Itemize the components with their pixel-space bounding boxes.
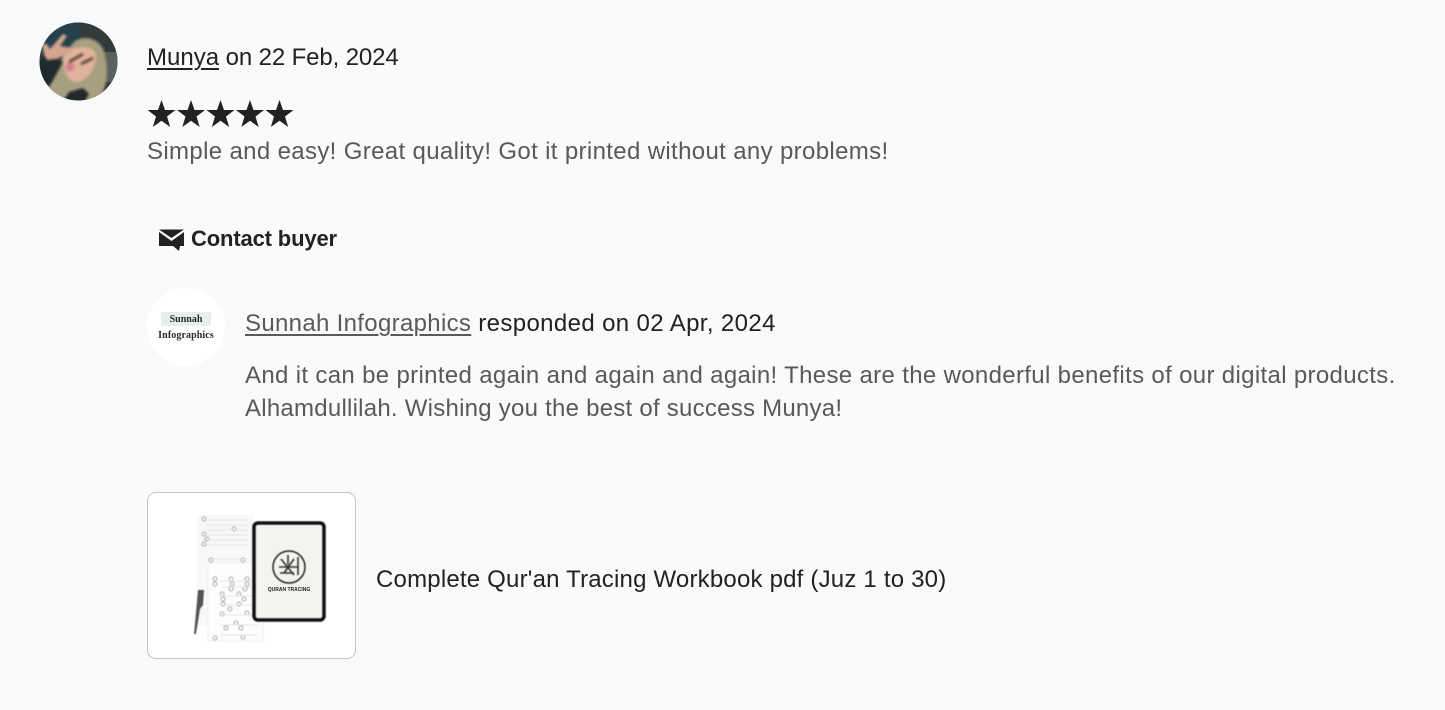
product card xyxy=(147,492,356,659)
icon: envelope xyxy=(159,230,184,251)
logo highlight xyxy=(161,312,211,326)
contact buyer link: Contact buyer xyxy=(191,226,337,251)
review text: Simple and easy! Great quality! Got it printed without any problems! xyxy=(147,138,888,165)
star rating xyxy=(148,100,294,127)
seller logo xyxy=(147,288,225,366)
product title: Complete Qur'an Tracing Workbook pdf (Juz 1 to 30) xyxy=(376,566,946,593)
logo text: Sunnah xyxy=(170,314,202,325)
product image: QURAN TRACING xyxy=(268,587,310,593)
seller response text xyxy=(245,362,1396,422)
icon: buyer avatar xyxy=(40,22,118,100)
seller response text: Alhamdullilah. Wishing you the best of success Munya! xyxy=(245,395,842,422)
reviewer name and date: Munya on 22 Feb, 2024 xyxy=(147,44,399,71)
logo text xyxy=(158,314,214,341)
product image xyxy=(193,516,327,642)
logo text: Infographics xyxy=(158,330,214,341)
seller response heading: Sunnah Infographics responded on 02 Apr, 2024 xyxy=(245,310,776,337)
seller response text: And it can be printed again and again and again! These are the wonderful benefits of our digital products. xyxy=(245,362,1396,389)
